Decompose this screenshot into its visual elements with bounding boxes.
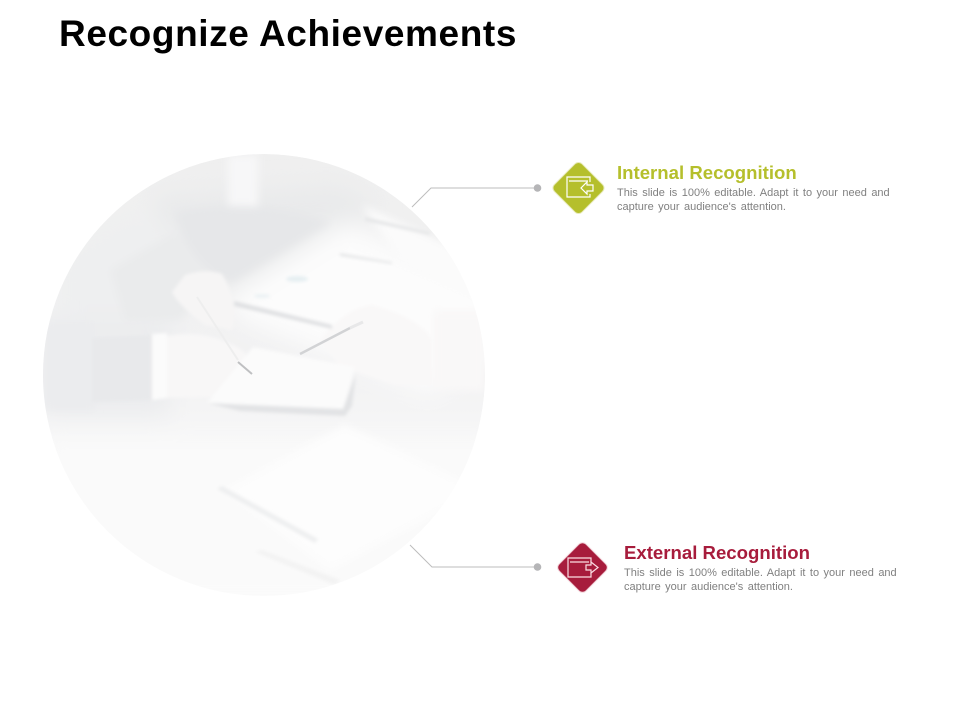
description: internal recognition: This slide is 100% editable. Adapt it to your need and <box>617 186 890 198</box>
description: external recognition <box>624 566 897 593</box>
connector: external recognition <box>410 545 541 571</box>
description: internal recognition <box>617 186 890 213</box>
text block: external recognition <box>624 542 897 593</box>
title: Recognize Achievements <box>59 13 517 54</box>
description: external recognition: This slide is 100% editable. Adapt it to your need and <box>624 566 897 578</box>
description: external recognition: capture your audience's attention. <box>624 581 793 593</box>
heading: internal recognition: Internal Recognition <box>617 162 797 183</box>
heading: external recognition: External Recognition <box>624 542 810 563</box>
description: internal recognition: capture your audience's attention. <box>617 201 786 213</box>
photo circle: faded business handshake scene <box>40 154 500 600</box>
connector: internal recognition <box>412 184 541 207</box>
text block: internal recognition <box>617 162 890 213</box>
icon: external recognition diamond <box>556 541 609 594</box>
icon: internal recognition diamond <box>551 160 606 216</box>
